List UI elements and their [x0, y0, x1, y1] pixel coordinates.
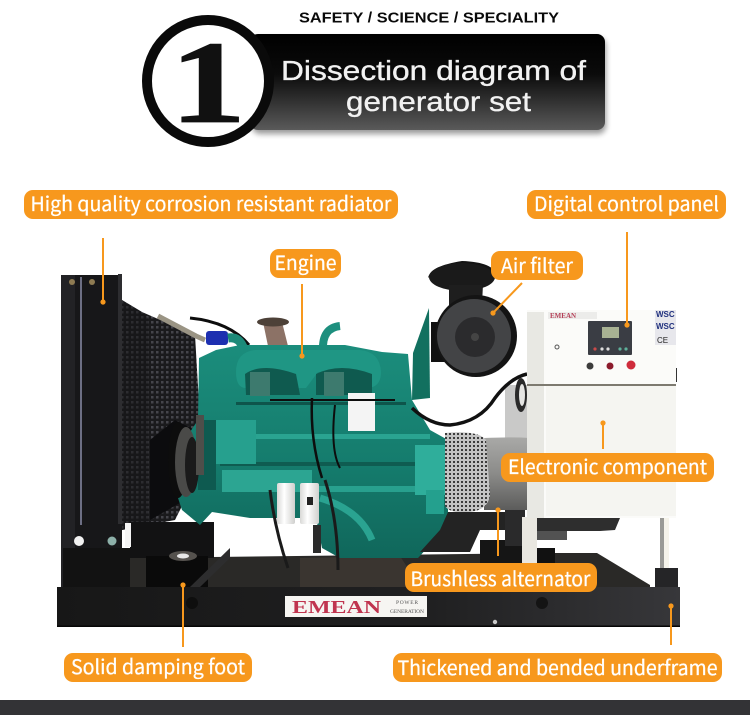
- engine mount block: [125, 522, 230, 588]
- pulley: [168, 422, 188, 498]
- leader: electronic component: [600, 420, 606, 449]
- controller panel: [588, 321, 632, 355]
- number badge: [147, 17, 269, 148]
- label: digital control panel: Digital control panel: [534, 188, 719, 217]
- control box legs: [522, 517, 678, 587]
- label: brushless alternator: Brushless alternator: [410, 563, 591, 592]
- number badge: 1: [170, 17, 246, 148]
- cabinet logo: [548, 312, 597, 320]
- label: engine: Engine: [274, 247, 336, 276]
- leader: engine: [299, 284, 305, 359]
- fuel filters and hoses: [270, 480, 338, 570]
- manifold: [236, 350, 381, 388]
- title banner: [250, 34, 606, 134]
- brand plate: POWER: [396, 600, 418, 606]
- bottom bar: [0, 700, 750, 715]
- label: radiator: High quality corrosion resistant radiator: [30, 188, 392, 217]
- generator set illustration: [57, 261, 680, 627]
- leader: alternator: [495, 507, 501, 556]
- ribs and highlights: [236, 402, 406, 405]
- title text: Dissection diagram of: [281, 55, 586, 86]
- leader: air filter: [490, 283, 522, 316]
- cabinet switches: [586, 360, 636, 370]
- radiator shroud grille: [122, 300, 200, 530]
- leader: underframe: [668, 603, 674, 645]
- certification marks: WSC: [656, 322, 675, 331]
- underframe: [57, 587, 680, 627]
- cabinet logo: EMEAN: [550, 312, 576, 320]
- tag: [348, 393, 375, 431]
- exhaust elbow: [257, 318, 289, 346]
- label: air filter: Air filter: [501, 250, 573, 279]
- coolant pipe and blue hose: [158, 316, 340, 350]
- air filter intake cap: [428, 261, 497, 307]
- alternator: [420, 432, 620, 566]
- cables: [312, 398, 322, 478]
- label: solid damping foot: Solid damping foot: [71, 651, 245, 680]
- engine body: [168, 345, 448, 558]
- wiring hose and silver canister: [412, 374, 527, 445]
- leader: damping foot: [180, 582, 186, 647]
- leader: radiator: [100, 238, 106, 305]
- certification marks: [655, 310, 676, 345]
- certification marks: CE: [657, 336, 668, 345]
- leader: control panel: [624, 232, 630, 328]
- brand plate: GENERATION: [390, 609, 424, 615]
- tagline: SAFETY / SCIENCE / SPECIALITY: [299, 10, 559, 26]
- certification marks: WSC: [656, 310, 675, 319]
- label: underframe: Thickened and bended underframe: [398, 652, 718, 681]
- radiator: [61, 274, 130, 587]
- brand plate: [285, 596, 427, 617]
- title text: generator set: [346, 86, 531, 117]
- electronic cabinet: [527, 310, 677, 518]
- green bracket plate: [412, 308, 430, 400]
- brand plate: EMEAN: [292, 597, 381, 617]
- label: electronic component: Electronic component: [508, 451, 707, 480]
- deck: [125, 553, 650, 587]
- air filter: [431, 295, 517, 377]
